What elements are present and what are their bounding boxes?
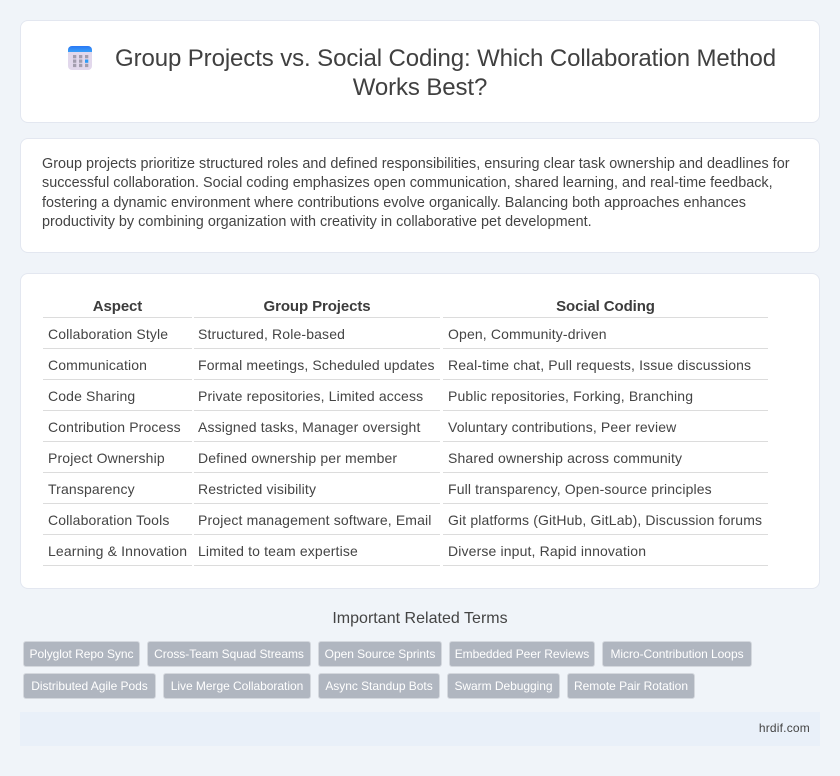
tag: Swarm Debugging xyxy=(454,679,553,693)
comparison table: Social Coding xyxy=(556,298,655,315)
tag: Distributed Agile Pods xyxy=(31,679,148,693)
comparison table: Private repositories, Limited access xyxy=(198,388,423,404)
tag: Remote Pair Rotation xyxy=(574,679,688,693)
tag xyxy=(318,641,442,667)
comparison table: Project Ownership xyxy=(48,450,165,466)
tag xyxy=(567,673,695,699)
tag xyxy=(602,641,752,667)
tag xyxy=(449,641,595,667)
panel: summary xyxy=(20,138,820,253)
comparison table: Limited to team expertise xyxy=(198,543,358,559)
panel: comparison table xyxy=(20,273,820,589)
comparison table: Voluntary contributions, Peer review xyxy=(448,419,676,435)
tag xyxy=(447,673,560,699)
comparison table: Assigned tasks, Manager oversight xyxy=(198,419,421,435)
comparison table: Defined ownership per member xyxy=(198,450,397,466)
tag: Embedded Peer Reviews xyxy=(455,647,589,661)
title: Group Projects vs. Social Coding: Which Collaboration Method xyxy=(115,45,776,72)
comparison table: Diverse input, Rapid innovation xyxy=(448,543,646,559)
comparison table: Group Projects xyxy=(264,298,370,315)
comparison table: Full transparency, Open-source principles xyxy=(448,481,712,497)
summary text xyxy=(42,156,790,230)
comparison table: Project management software, Email xyxy=(198,512,432,528)
title: Works Best? xyxy=(353,74,487,101)
footer source: hrdif.com xyxy=(759,721,810,735)
comparison table: Public repositories, Forking, Branching xyxy=(448,388,693,404)
icon: calendar xyxy=(68,46,92,70)
title xyxy=(115,45,776,101)
tag: Live Merge Collaboration xyxy=(171,679,303,693)
tag: Polyglot Repo Sync xyxy=(29,647,134,661)
tag xyxy=(23,641,140,667)
comparison table: Collaboration Tools xyxy=(48,512,169,528)
comparison table: Aspect xyxy=(93,298,142,315)
comparison table: Open, Community-driven xyxy=(448,326,607,342)
comparison table: Transparency xyxy=(48,481,135,497)
tag xyxy=(147,641,311,667)
comparison table: Code Sharing xyxy=(48,388,135,404)
tag xyxy=(23,673,156,699)
comparison table: Learning & Innovation xyxy=(48,543,187,559)
comparison table: Communication xyxy=(48,357,147,373)
panel: header xyxy=(20,20,820,123)
table header xyxy=(93,298,655,315)
tag: Open Source Sprints xyxy=(325,647,435,661)
related terms heading: Important Related Terms xyxy=(332,610,508,627)
tags: related terms xyxy=(23,641,752,699)
tag xyxy=(163,673,311,699)
tag: Cross-Team Squad Streams xyxy=(154,647,304,661)
comparison table: Formal meetings, Scheduled updates xyxy=(198,357,435,373)
tag: Micro-Contribution Loops xyxy=(610,647,744,661)
summary text: productivity by combining organization with creativity in collaborative pet development. xyxy=(42,214,592,230)
comparison table: Structured, Role-based xyxy=(198,326,345,342)
comparison table xyxy=(43,298,768,566)
comparison table: Shared ownership across community xyxy=(448,450,682,466)
comparison table: Collaboration Style xyxy=(48,326,168,342)
summary text: Group projects prioritize structured roles and defined responsibilities, ensuring clear task ownership and deadlines for xyxy=(42,156,790,172)
tag xyxy=(318,673,440,699)
tag: Async Standup Bots xyxy=(325,679,433,693)
comparison table: Contribution Process xyxy=(48,419,181,435)
comparison table: Restricted visibility xyxy=(198,481,316,497)
footer xyxy=(20,712,820,746)
summary text: fostering a dynamic environment where contributions evolve organically. Balancing both approaches enhances xyxy=(42,195,746,211)
comparison table: Real-time chat, Pull requests, Issue discussions xyxy=(448,357,751,373)
summary text: successful collaboration. Social coding emphasizes open communication, shared learning, and real-time feedback, xyxy=(42,175,773,191)
comparison table: Git platforms (GitHub, GitLab), Discussion forums xyxy=(448,512,762,528)
table rows xyxy=(48,326,762,559)
